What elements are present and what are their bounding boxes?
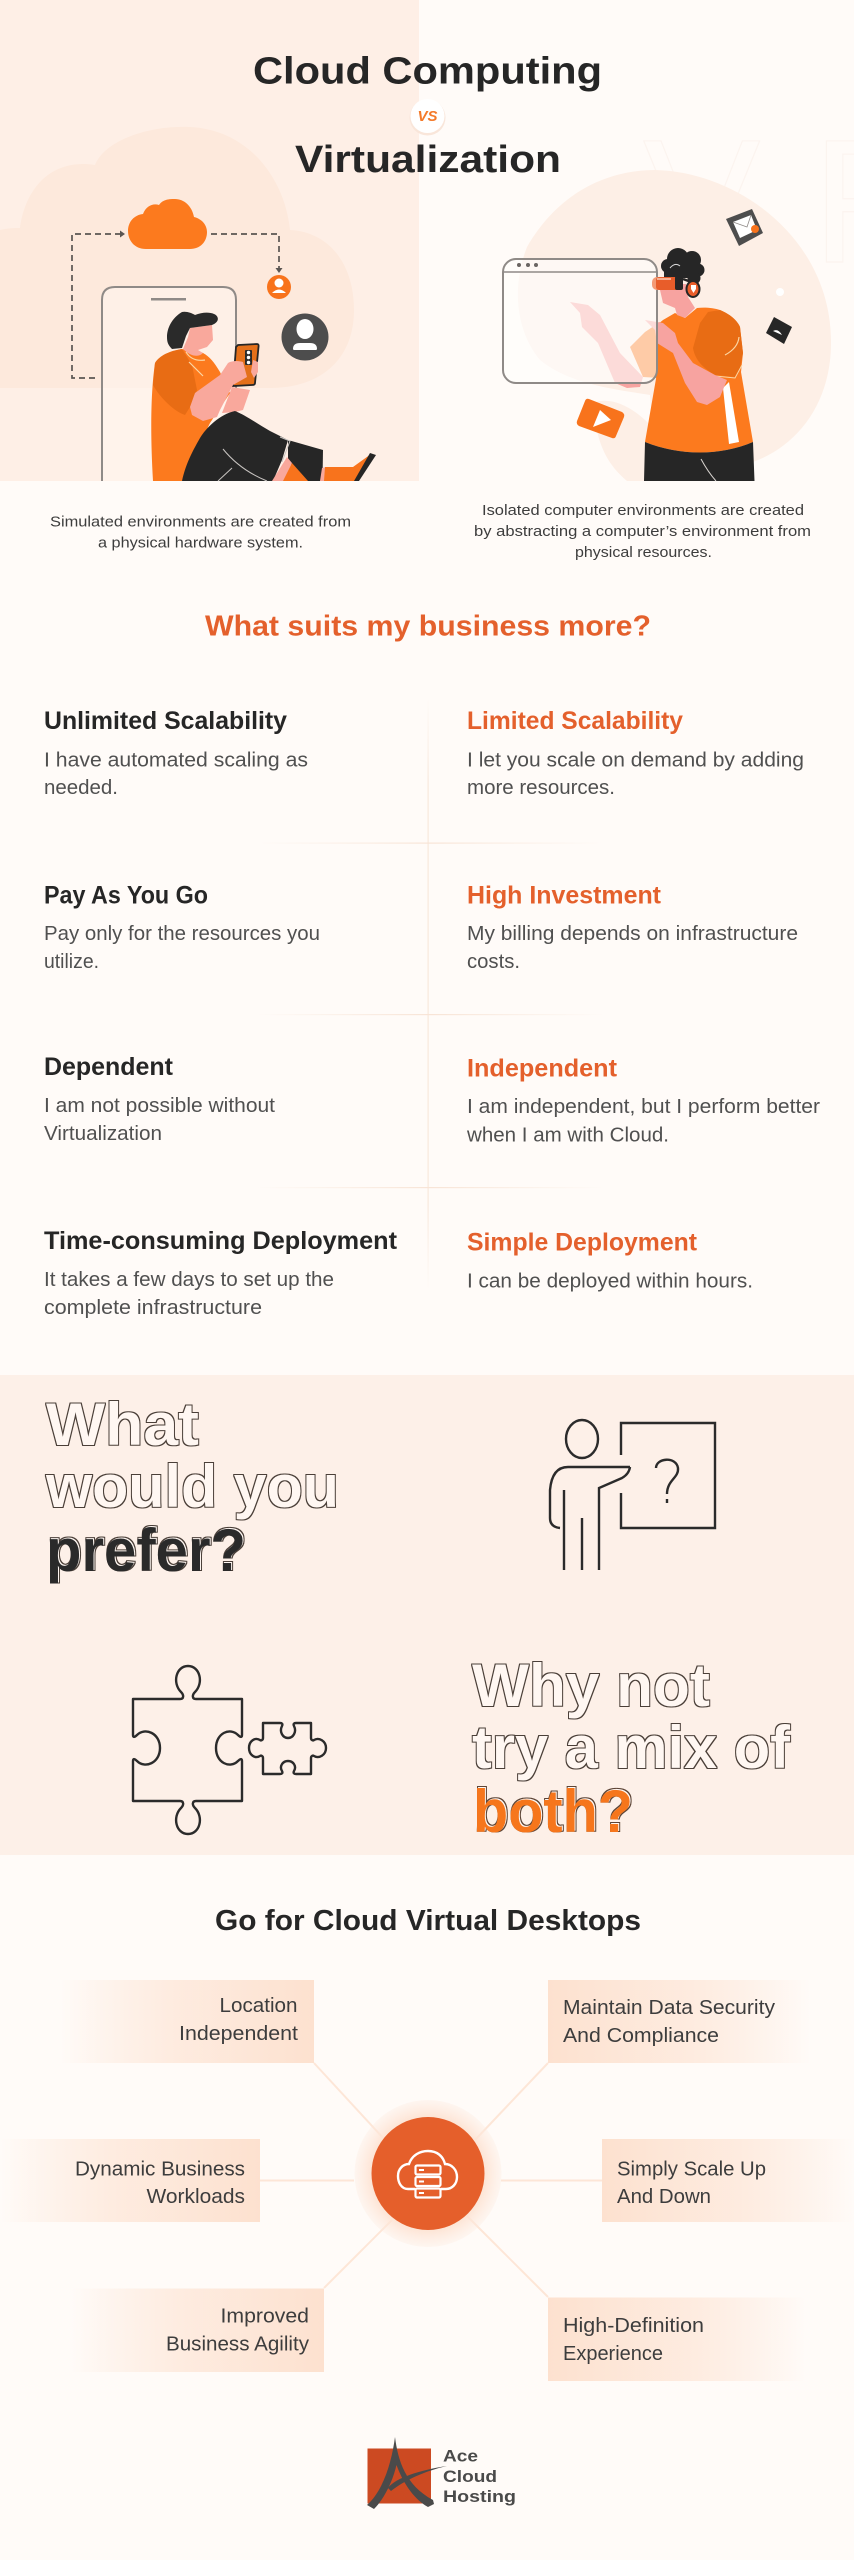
benefit: dynamic workloads: Workloads bbox=[146, 2185, 245, 2208]
pay as you go bbox=[44, 882, 320, 973]
dashed arrows bbox=[72, 234, 279, 378]
limited scalability: more resources. bbox=[467, 776, 615, 799]
limited scalability: I let you scale on demand by adding bbox=[467, 748, 804, 772]
benefit: location independent: Independent bbox=[179, 2022, 298, 2045]
heading: what would you prefer: prefer? bbox=[47, 1516, 247, 1583]
title line 1: Cloud Computing bbox=[253, 50, 602, 92]
connector lines bbox=[260, 2063, 602, 2297]
logo: ace cloud hosting: Cloud bbox=[443, 2467, 497, 2486]
dependent: I am not possible without bbox=[44, 1094, 275, 1117]
benefit: dynamic workloads: Dynamic Business bbox=[75, 2158, 245, 2180]
shirt collar lines bbox=[186, 352, 205, 376]
trousers bbox=[288, 440, 323, 481]
benefit: scale up and down bbox=[602, 2139, 854, 2222]
background blob bbox=[518, 170, 831, 462]
benefit: data security: Maintain Data Security bbox=[563, 1996, 776, 2019]
shirt bbox=[151, 349, 230, 481]
phone outline bbox=[102, 287, 236, 481]
browser window bbox=[503, 259, 657, 383]
VR headset bbox=[652, 276, 700, 297]
icon: gray user bbox=[282, 314, 328, 360]
dark sleeve bbox=[153, 349, 197, 415]
unlimited scalability: Unlimited Scalability bbox=[44, 707, 287, 735]
trousers bbox=[644, 442, 754, 481]
panel: cloud computing illustration bbox=[0, 0, 419, 481]
vs badge: VS bbox=[418, 108, 438, 125]
heading: what would you prefer: What bbox=[46, 1391, 199, 1458]
neck and face bbox=[660, 284, 695, 318]
high investment: costs. bbox=[467, 950, 520, 973]
white stripe bbox=[723, 382, 739, 444]
benefit: business agility bbox=[71, 2288, 324, 2372]
independent: when I am with Cloud. bbox=[466, 1124, 669, 1146]
pay as you go: Pay As You Go bbox=[44, 882, 208, 910]
logo: ace cloud hosting: Hosting bbox=[443, 2487, 516, 2506]
hair bbox=[661, 248, 704, 284]
benefit: location independent bbox=[60, 1980, 314, 2063]
simple deployment: Simple Deployment bbox=[467, 1228, 698, 1256]
white dot bbox=[776, 288, 784, 296]
shirt bbox=[645, 308, 753, 452]
text: virtualization description: by abstracting a computer’s environment from bbox=[474, 524, 811, 540]
independent: Independent bbox=[467, 1054, 618, 1082]
text: virtualization description: Isolated computer environments are created bbox=[482, 503, 804, 519]
benefit: location independent: Location bbox=[220, 1994, 298, 2017]
high investment: My billing depends on infrastructure bbox=[467, 922, 798, 945]
unlimited scalability: needed. bbox=[44, 776, 118, 799]
simple deployment bbox=[467, 1228, 753, 1292]
blob lower lobe bbox=[593, 401, 650, 481]
benefit: high definition: Experience bbox=[563, 2342, 663, 2365]
benefit: scale up and down: Simply Scale Up bbox=[617, 2158, 766, 2180]
phone bbox=[233, 344, 259, 386]
time-consuming deployment: Time-consuming Deployment bbox=[44, 1227, 398, 1255]
comparison dividers bbox=[256, 697, 605, 1291]
panel: what would you prefer bbox=[0, 1375, 854, 1855]
benefit: high definition bbox=[548, 2298, 806, 2381]
time-consuming deployment: complete infrastructure bbox=[44, 1296, 262, 1319]
title line 2: Virtualization bbox=[295, 139, 561, 181]
icon: black card bbox=[766, 317, 792, 344]
front arm and hand bbox=[190, 361, 247, 421]
dependent: Dependent bbox=[44, 1053, 174, 1081]
band background bbox=[0, 1375, 854, 1855]
time-consuming deployment: It takes a few days to set up the bbox=[44, 1268, 334, 1291]
heading: what would you prefer: would you bbox=[45, 1453, 339, 1520]
limited scalability bbox=[467, 707, 804, 799]
text: cloud description bbox=[50, 514, 351, 552]
row: scalability bbox=[44, 707, 804, 799]
panel: virtualization illustration bbox=[503, 104, 854, 481]
icon: play button bbox=[577, 399, 624, 438]
background cloud shape bbox=[0, 127, 354, 388]
dark sleeve bbox=[693, 310, 743, 377]
hub: cloud server icon bbox=[354, 2100, 502, 2247]
person body bbox=[644, 248, 754, 481]
heading: go for cloud virtual desktops: Go for Cloud Virtual Desktops bbox=[215, 1905, 641, 1937]
icon: orange cloud bbox=[128, 199, 207, 249]
logo: ace cloud hosting: Ace bbox=[443, 2446, 478, 2466]
high investment bbox=[467, 882, 798, 973]
heading: why not try a mix of both: Why not bbox=[472, 1652, 710, 1719]
icon: person at question board bbox=[550, 1420, 715, 1570]
text: virtualization description bbox=[474, 503, 811, 561]
left ankle and shoe bbox=[272, 457, 292, 481]
benefit: data security bbox=[548, 1980, 811, 2063]
hair bbox=[167, 312, 218, 349]
row: dependency bbox=[44, 1053, 820, 1146]
high investment: High Investment bbox=[467, 882, 662, 910]
vs badge bbox=[410, 99, 446, 136]
heading: why not try a mix of both: both? bbox=[474, 1777, 634, 1844]
left panel background bbox=[0, 0, 419, 481]
dependent bbox=[44, 1053, 275, 1145]
icon: puzzle pieces bbox=[133, 1666, 326, 1834]
pay as you go: Pay only for the resources you bbox=[44, 922, 320, 945]
simple deployment: I can be deployed within hours. bbox=[467, 1270, 753, 1292]
arm bbox=[645, 320, 727, 405]
icon: email card bbox=[726, 209, 763, 246]
logo: ace cloud hosting bbox=[367, 2437, 516, 2509]
benefit: data security: And Compliance bbox=[563, 2024, 719, 2047]
text: cloud description: a physical hardware system. bbox=[98, 536, 303, 552]
right ankle and shoe bbox=[320, 467, 326, 481]
title bbox=[253, 50, 602, 181]
pay as you go: utilize. bbox=[44, 950, 99, 973]
benefit: business agility: Improved bbox=[220, 2304, 309, 2328]
arrow heads bbox=[120, 230, 282, 273]
independent: I am independent, but I perform better bbox=[467, 1095, 820, 1118]
benefit: business agility: Business Agility bbox=[166, 2332, 310, 2356]
benefit: scale up and down: And Down bbox=[617, 2185, 711, 2208]
benefit: high definition: High-Definition bbox=[563, 2314, 704, 2337]
back forearm bbox=[222, 387, 250, 413]
limited scalability: Limited Scalability bbox=[467, 707, 683, 735]
icon: small user bbox=[267, 275, 291, 299]
time-consuming deployment bbox=[44, 1227, 398, 1319]
row: deployment bbox=[44, 1227, 753, 1319]
person back arm bbox=[570, 302, 660, 388]
heading: why not try a mix of both bbox=[472, 1652, 791, 1844]
unlimited scalability bbox=[44, 707, 308, 799]
benefit: dynamic workloads bbox=[0, 2139, 260, 2222]
person with phone bbox=[151, 312, 376, 481]
independent bbox=[466, 1054, 820, 1146]
heading: what would you prefer bbox=[45, 1391, 339, 1583]
text: virtualization description: physical resources. bbox=[575, 545, 712, 561]
unlimited scalability: I have automated scaling as bbox=[44, 748, 308, 772]
dependent: Virtualization bbox=[44, 1122, 162, 1145]
text: cloud description: Simulated environments are created from bbox=[50, 514, 351, 530]
heading: what suits my business: What suits my business more? bbox=[205, 610, 651, 642]
row: cost bbox=[44, 882, 798, 973]
heading: why not try a mix of both: try a mix of bbox=[472, 1714, 791, 1781]
neck and face bbox=[183, 325, 213, 356]
